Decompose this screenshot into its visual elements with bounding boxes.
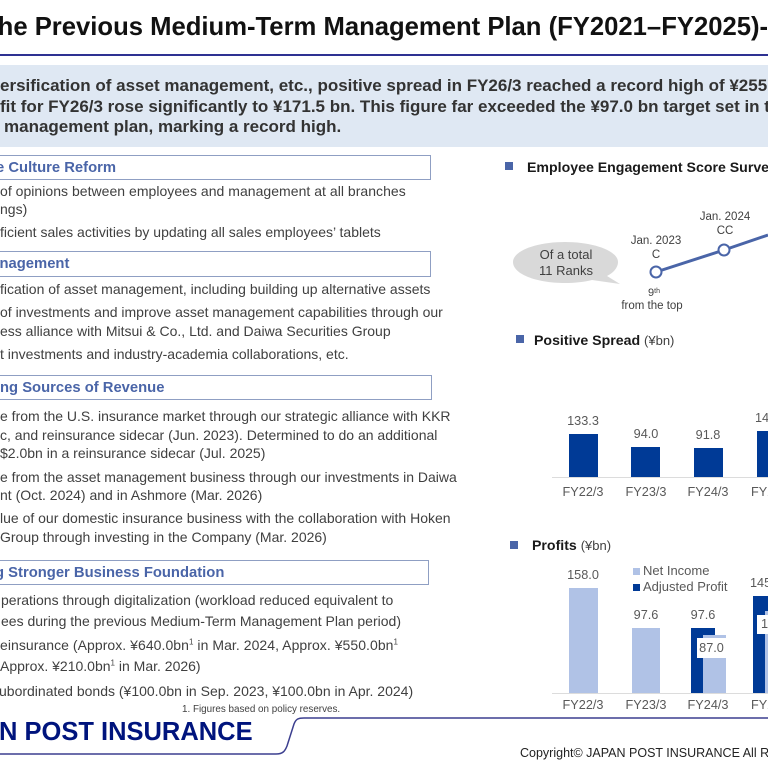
profits chart: 97.6 [691,608,715,622]
point Jan 2024: CC [717,225,733,237]
foundation text [0,592,413,699]
title: The Previous Medium-Term Management Plan (FY2021–FY2025)- [0,13,768,41]
FY22/3 bar [569,434,598,477]
title rule [0,54,768,56]
positive spread chart: 91.8 [696,428,720,442]
profits chart [552,563,768,712]
FY22/3 net income [569,588,598,693]
profits chart: FY23/3 [626,698,666,712]
footnote: 1. Figures based on policy reserves. [182,704,340,715]
axis labels: FY22/3 [563,485,603,499]
culture reform text: of opinions between employees and management at all branches [0,183,406,199]
point Jan 2024 [700,211,751,256]
FY24/3 label box [697,638,726,658]
legend: Net Income [643,563,709,578]
point Jan 2024: Jan. 2024 [700,211,751,223]
asset management text: t investments and industry-academia collaborations, etc. [0,346,349,362]
axis [552,693,768,694]
callout bubble: Of a total [540,247,592,262]
summary panel [0,65,768,147]
heading: business foundation [0,560,429,585]
FY23/3 bar [631,447,660,477]
logo wordmark: N POST INSURANCE [0,718,253,746]
foundation text: einsurance (Approx. ¥640.0bn1 in Mar. 2024, Approx. ¥550.0bn1 [0,637,398,653]
legend [633,563,728,594]
summary line 2: fit for FY26/3 rose significantly to ¥171.5 bn. This figure far exceeded the ¥97.0 bn target set in t [0,97,768,116]
profits chart: FY24/3 [688,698,728,712]
value labels: 133.3 [567,414,599,428]
heading: positive spread: Positive Spread (¥bn) [534,332,674,348]
FY25/3 label box [757,615,768,634]
FY24/3 adjusted profit [691,628,715,693]
asset management text: ess alliance with Mitsui & Co., Ltd. and Daiwa Securities Group [0,323,391,339]
culture reform text: ngs) [0,201,27,217]
axis labels: FY22/3 [563,698,603,712]
FY24/3 net income [703,635,726,693]
callout bubble: 11 Ranks [539,263,593,278]
heading: employee engagement: Employee Engagement Score Surve [527,159,768,175]
summary line 3: management plan, marking a record high. [4,117,341,136]
positive spread square [516,335,524,343]
foundation text: perations through digitalization (workload reduced equivalent to [1,592,393,608]
callout bubble [513,242,620,284]
revenue text: nt (Oct. 2024) and in Ashmore (Mar. 2026) [0,487,262,503]
revenue text: $2.0bn in a reinsurance sidecar (Jul. 2025) [0,445,265,461]
engagement chart [513,211,768,312]
FY25/3 net income [765,611,768,693]
point Jan 2023 [621,235,683,312]
axis [552,477,768,478]
heading: management: nagement [0,256,69,272]
asset management text: of investments and improve asset management capabilities through our [0,304,443,320]
profits chart: 97.6 [634,608,658,622]
FY24/3 label box: 87.0 [699,641,724,655]
FY24/3 bar [694,448,723,477]
asset management text [0,281,443,362]
point Jan 2023: from the top [621,300,683,312]
point Jan 2023: 9 [648,287,654,299]
summary line 1: ersification of asset management, etc., positive spread in FY26/3 reached a record high of ¥255 [0,76,767,95]
FY25/3 label box: 1 [761,617,768,631]
heading: culture reform [0,154,431,180]
footer band outline [0,717,768,755]
positive spread chart: FY24/3 [688,485,728,499]
revenue text: c, and reinsurance sidecar (Jun. 2023). Determined to do an additional [0,427,437,443]
profits square [510,541,518,549]
legend: Adjusted Profit [643,579,728,594]
asset management text: fication of asset management, including building up alternative assets [0,281,430,297]
culture reform text: ficient sales activities by updating all sales employees’ tablets [0,224,381,240]
revenue text: lue of our domestic insurance business with the collaboration with Hoken [0,510,451,526]
foundation text: ees during the previous Medium-Term Management Plan period) [1,613,401,629]
heading: sources of revenue [0,374,432,400]
revenue text: e from the asset management business through our investments in Daiwa [0,469,457,485]
employee engagement square [505,162,513,170]
foundation text: ubordinated bonds (¥100.0bn in Sep. 2023, ¥100.0bn in Apr. 2024) [0,683,413,699]
foundation text: Approx. ¥210.0bn1 in Mar. 2026) [0,658,201,674]
heading: business foundation: g Stronger Business Foundation [0,564,224,580]
revenue text: Group through investing in the Company (Mar. 2026) [0,529,327,545]
culture reform text [0,183,406,240]
revenue text: e from the U.S. insurance market through our strategic alliance with KKR [0,408,451,424]
trend line [656,235,768,272]
copyright: Copyright© JAPAN POST INSURANCE All R [520,746,768,760]
revenue text [0,408,457,545]
heading: management [0,251,431,276]
FY25/3 adjusted profit [753,596,768,693]
heading: profits: Profits (¥bn) [532,537,611,553]
value labels: 158.0 [567,568,599,582]
FY23/3 net income [632,628,660,693]
positive spread chart [552,411,768,499]
positive spread chart: FY23/3 [626,485,666,499]
FY25/3 bar [757,431,768,477]
positive spread chart: 94.0 [634,427,658,441]
point Jan 2023: Jan. 2023 [631,235,681,247]
point Jan 2023: C [652,249,660,261]
heading: sources of revenue: ng Sources of Revenue [0,380,164,396]
point Jan 2023: th [654,288,660,295]
